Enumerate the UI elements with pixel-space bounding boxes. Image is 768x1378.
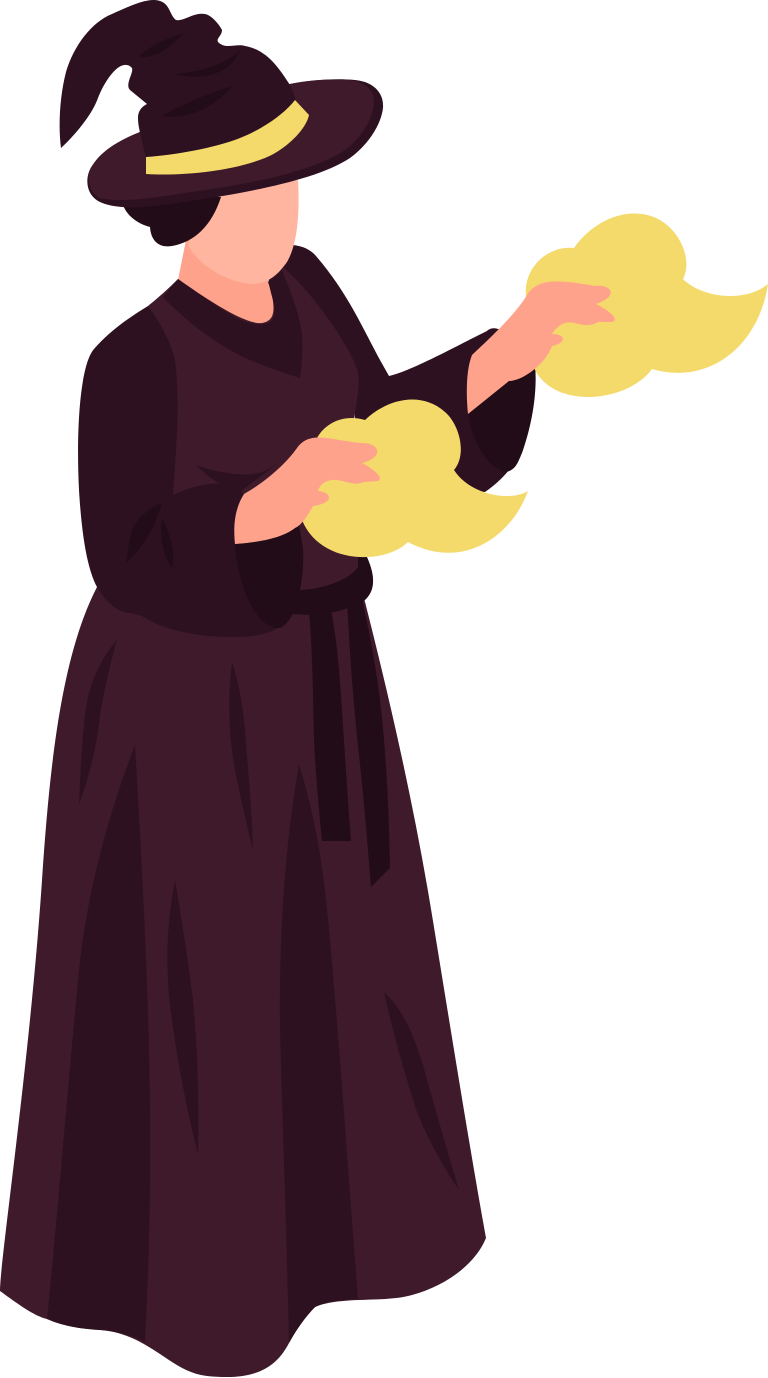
dress skirt [0,560,486,1377]
torso [135,268,359,606]
neck [178,240,275,329]
hat creases [139,34,240,117]
right hand [467,282,615,414]
left cloud [302,400,528,557]
hat brim [87,79,383,207]
collar [163,270,302,378]
front sleeve: left arm [78,306,303,637]
right cloud [526,214,768,397]
hat crown [60,0,296,158]
belt loop [291,557,373,615]
skirt folds [47,640,459,1343]
left hand [234,438,380,544]
hat band [146,100,309,174]
belt hanging ends [309,590,390,887]
hair [123,190,221,246]
back sleeve: right arm [262,245,536,492]
face [188,180,299,284]
